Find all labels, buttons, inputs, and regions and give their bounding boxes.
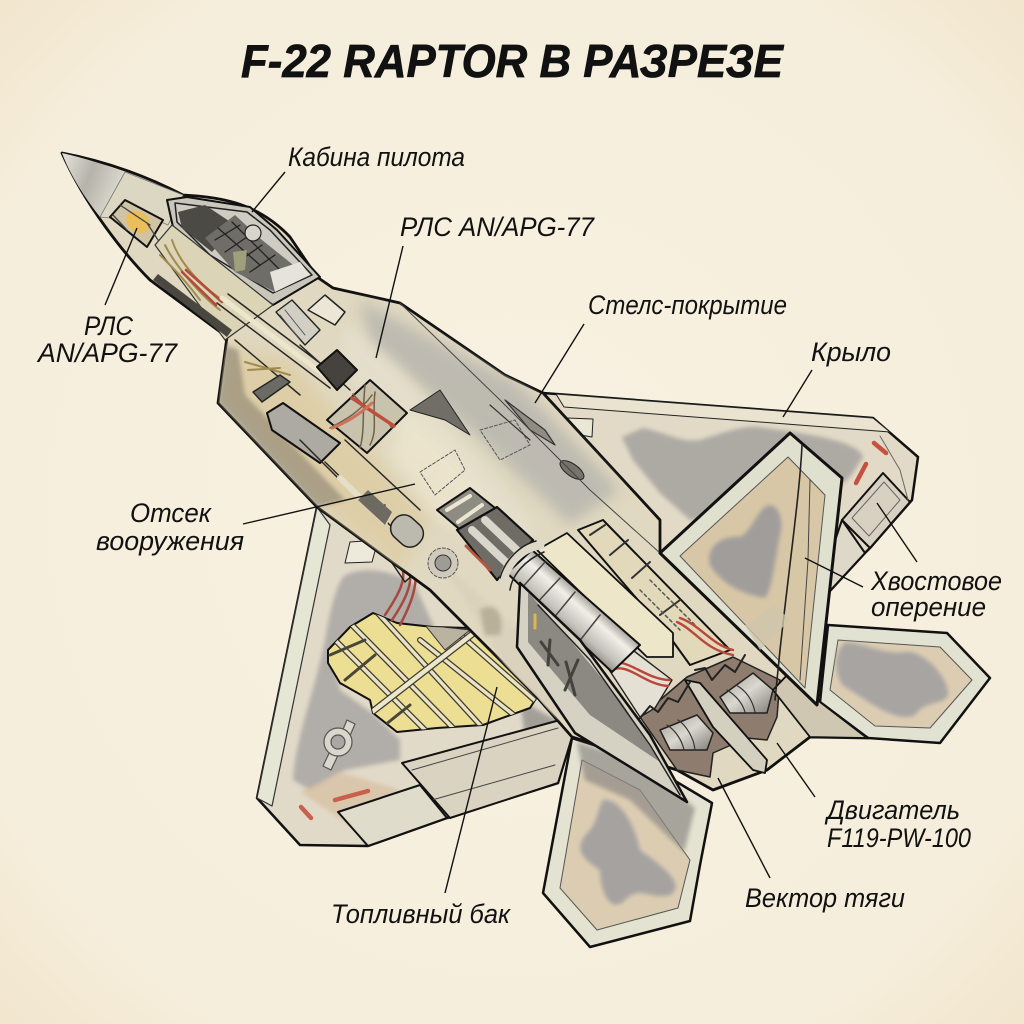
left vertical tail [517,583,687,802]
right wing [543,393,918,650]
forward fuselage skin [100,172,183,225]
tail fin marking [541,640,578,695]
left flap inner [338,785,447,846]
engine barrel [500,541,640,672]
wing camouflage [293,570,440,790]
wire bay [327,380,407,453]
callout: fuel tank [331,687,511,929]
upper intake panel [308,295,345,325]
callout: cockpit [252,142,465,212]
right horizontal stabilizer [820,625,990,743]
fuselage dark hex marker [553,538,578,567]
cockpit and canopy [167,197,320,305]
callout: nose radar: РЛС [84,311,133,341]
round hatch [428,548,458,578]
upper vents on wing root [490,400,555,445]
left engine red wiring section [608,648,672,717]
callout: thrust vectoring: Вектор тяги [745,883,905,913]
body wing seam [400,303,660,553]
missile pod [358,490,428,552]
callout: tail: Хвостовое [870,566,1002,596]
callout: tail [805,503,1002,622]
callout: stealth coating: Стелс-покрытие [588,290,787,320]
callout: cockpit: Кабина пилота [288,142,465,172]
nose radar bay [110,200,163,247]
dashed panel lines [420,420,530,495]
callout: engine: Двигатель [824,795,960,825]
engine collar ring [503,545,540,583]
callout: weapons bay: Отсек [130,498,212,528]
avionics vent [253,375,290,402]
red wiring bundle [385,562,416,625]
right flap [825,520,865,593]
tail camouflage patch [709,505,781,598]
dark equipment bay [317,350,357,390]
red wing marks [301,791,368,818]
left horizontal stabilizer [543,738,712,947]
nozzle backing [640,657,780,777]
right vertical tail [660,433,842,705]
callout: wing: Крыло [811,337,891,367]
callout: weapons bay [96,484,415,556]
fuel tank with ribs [328,610,540,735]
rail to rear [300,440,420,530]
lower side bay [267,403,340,463]
fuselage watercolor shading [220,345,430,570]
nose radome [62,153,125,217]
callout: wing [783,337,891,417]
title: F-22 RAPTOR В РАЗРЕЗЕ [241,35,784,87]
avionics bay [276,300,320,345]
callout: stealth coating [535,290,787,403]
F-22 cutaway illustration [62,153,990,947]
left engine nozzle [660,715,713,750]
dorsal round vent [557,457,587,483]
left wing [257,507,572,846]
dark fin slot [410,390,470,435]
left flap outer [402,720,572,818]
cream nacelle panel [537,533,673,657]
structural rails [217,294,350,395]
nacelle right tail root [773,672,867,738]
callout: nose radar [36,228,178,368]
right engine nozzle [720,673,773,713]
callout: nose radar: AN/APG-77 [36,338,178,368]
red wing marks [856,443,886,483]
callout: fuel tank: Топливный бак [331,899,511,929]
fuselage [62,153,868,790]
forward equipment bay with wiring [153,225,273,340]
callout: thrust vectoring [718,778,905,913]
right engine red wiring [677,618,733,655]
callout: radar upper: РЛС AN/APG-77 [400,212,595,242]
wing access panel [345,540,378,563]
central tail boom [685,680,767,773]
wing access panel [563,418,593,437]
callout: tail: оперение [871,592,986,622]
zigzag panel edge [640,655,745,718]
weapons bay one [437,488,510,545]
callout: weapons bay: вооружения [96,526,244,556]
right aileron [842,473,910,548]
callout: engine: F119-PW-100 [827,823,971,853]
callout: radar upper [376,212,595,358]
rear upper bay [578,520,733,665]
weapons bay two [457,507,533,580]
wing leading edge strip [257,507,330,806]
wing roundel [323,720,355,770]
wing camouflage patch [622,427,863,520]
callout: engine [777,743,971,853]
